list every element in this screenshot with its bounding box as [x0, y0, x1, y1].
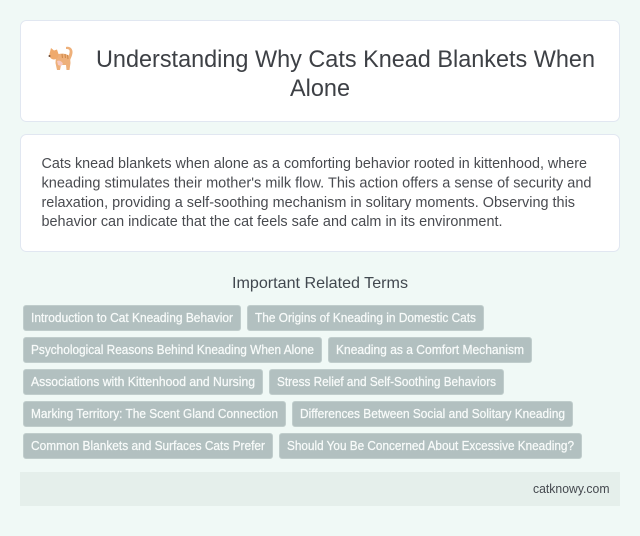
tag: marking territory: [24, 402, 286, 426]
footer: [20, 472, 620, 506]
tag: surfaces: Common Blankets and Surfaces Cats Prefer: [31, 439, 265, 453]
tag: origins: The Origins of Kneading in Domestic Cats: [255, 311, 476, 325]
text block: description: behavior can indicate that the cat feels safe and calm in its environment.: [42, 214, 502, 230]
tag: marking territory: Marking Territory: The Scent Gland Connection: [31, 407, 278, 421]
text block: description: Cats knead blankets when alone as a comforting behavior rooted in kittenhood, where: [42, 156, 587, 172]
tag: introduction: [24, 306, 240, 330]
tag: social vs solitary: Differences Between Social and Solitary Kneading: [300, 407, 565, 421]
tag: stress relief: Stress Relief and Self-Soothing Behaviors: [277, 375, 496, 389]
heading: related terms: Important Related Terms: [232, 275, 408, 292]
tag group: related terms: [24, 306, 582, 458]
text block: description: relaxation, providing a self-soothing mechanism in solitary moments. Observing this: [42, 195, 575, 211]
tag: stress relief: [270, 370, 504, 394]
tag: kittenhood: Associations with Kittenhood and Nursing: [31, 375, 255, 389]
tag: excessive kneading: Should You Be Concerned About Excessive Kneading?: [287, 439, 574, 453]
panel: description: [20, 134, 620, 252]
text block: description: [42, 156, 591, 230]
tag: comfort mechanism: [328, 338, 532, 362]
icon: cat: [48, 47, 73, 70]
tag: psychological reasons: [24, 338, 322, 362]
tag: surfaces: [24, 434, 272, 458]
footer: source text: catknowy.com: [533, 481, 610, 496]
tag: introduction: Introduction to Cat Kneading Behavior: [31, 311, 233, 325]
tag: psychological reasons: Psychological Reasons Behind Kneading When Alone: [31, 343, 314, 357]
tag: origins: [248, 306, 484, 330]
panel: title card: [20, 20, 620, 122]
tag: comfort mechanism: Kneading as a Comfort Mechanism: [336, 343, 524, 357]
tag: excessive kneading: [280, 434, 582, 458]
text block: description: kneading stimulates their mother's milk flow. This action offers a sense of security and: [42, 176, 591, 192]
tag: kittenhood: [24, 370, 262, 394]
tag: social vs solitary: [292, 402, 572, 426]
heading: title: Alone: [290, 75, 350, 102]
heading: title: [96, 46, 595, 102]
heading: title: Understanding Why Cats Knead Blankets When: [96, 46, 595, 73]
